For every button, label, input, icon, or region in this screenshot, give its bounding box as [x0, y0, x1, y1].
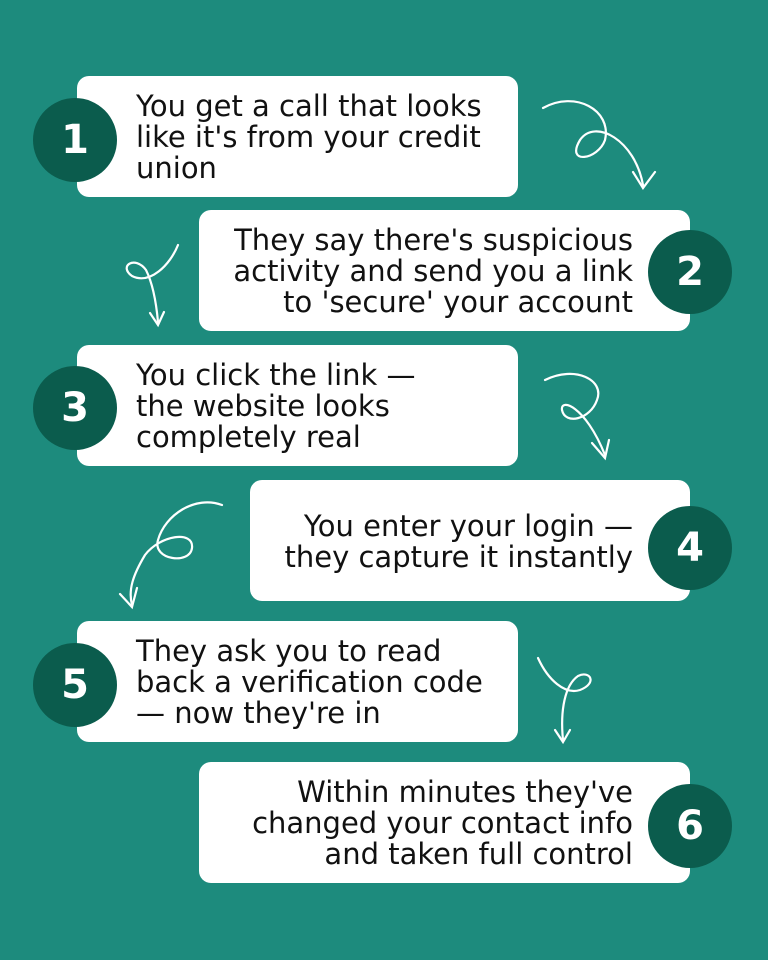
step 1 card: union: [136, 151, 217, 185]
step 2 card: to 'secure' your account: [283, 285, 633, 319]
step 5 card: — now they're in: [136, 696, 381, 730]
arrow: 3 to 4: [545, 374, 609, 458]
step 5 number: [33, 643, 117, 727]
step 3 number: 3: [61, 385, 89, 431]
step 5 card: back a verification code: [136, 665, 483, 699]
step 2 card: [199, 210, 690, 331]
step 2 number: 2: [676, 249, 704, 295]
step 3 card: the website looks: [136, 389, 390, 423]
step 3 card: [77, 345, 518, 466]
step 5 card: [77, 621, 518, 742]
arrow: 1 to 2: [543, 101, 655, 188]
step 1 number: [33, 98, 117, 182]
arrow: 2 to 3: [127, 245, 178, 325]
step 6 card: [199, 762, 690, 883]
step 4 number: [648, 506, 732, 590]
step 6 card: Within minutes they've: [297, 775, 633, 809]
step 3 card: You click the link —: [136, 358, 416, 392]
arrow: 4 to 5: [120, 502, 222, 607]
step 6 number: 6: [676, 803, 704, 849]
step 5 number: 5: [61, 662, 89, 708]
step 1 card: like it's from your credit: [136, 120, 481, 154]
step 1 number: 1: [61, 117, 89, 163]
step 5 card: They ask you to read: [136, 634, 441, 668]
step 4 card: they capture it instantly: [284, 540, 633, 574]
step 3 number: [33, 366, 117, 450]
step 2 card: They say there's suspicious: [234, 223, 633, 257]
arrow: 5 to 6: [538, 658, 591, 742]
step 6 card: changed your contact info: [252, 806, 633, 840]
step 4 card: [250, 480, 690, 601]
step 1 card: You get a call that looks: [136, 89, 482, 123]
step 6 card: and taken full control: [324, 837, 633, 871]
step 1 card: [77, 76, 518, 197]
step 4 card: You enter your login —: [304, 508, 633, 542]
step 3 card: completely real: [136, 420, 361, 454]
step 6 number: [648, 784, 732, 868]
step 4 number: 4: [676, 525, 704, 571]
step 2 card: activity and send you a link: [233, 254, 633, 288]
step 2 number: [648, 230, 732, 314]
